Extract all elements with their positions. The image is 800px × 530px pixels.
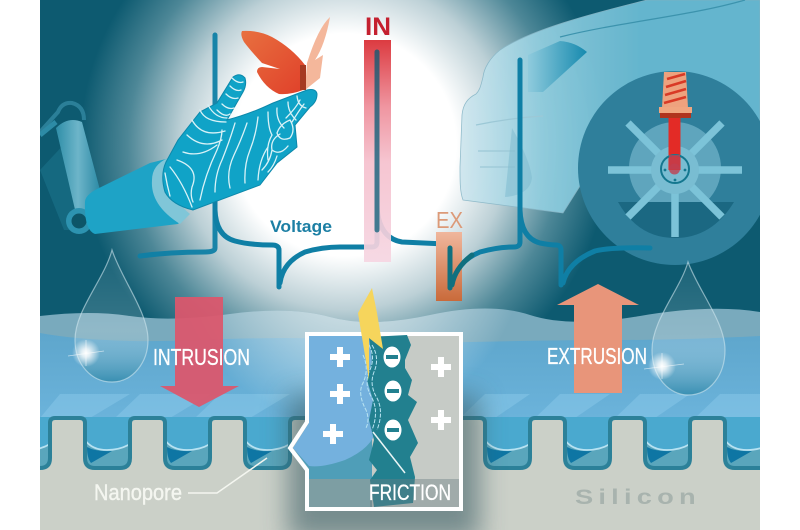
IN marker: [364, 13, 391, 262]
finger contour lines: [165, 78, 306, 207]
voltage label: Voltage: [270, 217, 332, 236]
water layer: [40, 308, 760, 418]
butterfly: [241, 17, 330, 94]
icon: wheel hub: [661, 155, 689, 183]
plus charges: [323, 347, 451, 444]
background glow: [40, 0, 760, 322]
pore water and light ripples: [40, 394, 760, 418]
glow over water: [223, 308, 504, 404]
nanopore label: [94, 458, 267, 505]
silicon label: Silicon: [575, 486, 701, 509]
water drop right: [644, 262, 725, 395]
EX marker: [436, 207, 472, 301]
extrusion label: EXTRUSION: [547, 343, 647, 369]
IN label: IN: [365, 13, 391, 41]
nanopore pointer line: [373, 432, 405, 473]
icon: headlight: [528, 41, 587, 92]
wheel: [578, 71, 772, 265]
voltage line: [140, 35, 650, 288]
nanopores: [0, 417, 775, 530]
lightning bolt: [358, 288, 383, 380]
car: [460, 0, 772, 265]
silicon substrate: [0, 418, 775, 530]
nanopore label: Nanopore: [94, 480, 182, 505]
EX label: EX: [436, 207, 463, 233]
minus charges: [384, 346, 402, 440]
inset shadow: [288, 395, 480, 530]
bottom band base: [309, 479, 372, 507]
extrusion arrow: [557, 284, 639, 393]
icon: suspension spring: [659, 72, 692, 170]
bottom band overlay: [370, 479, 459, 507]
icon: wheel spokes: [608, 123, 742, 237]
intrusion arrow: [160, 297, 239, 407]
robot arm: [40, 103, 100, 234]
icon: car roof line: [560, 0, 745, 37]
hand: [85, 75, 317, 234]
jagged solid layer: [367, 335, 418, 507]
intrusion label: INTRUSION: [153, 344, 250, 370]
blue liquid section: [293, 336, 372, 479]
inset panel: friction: [290, 288, 461, 509]
friction squiggles: [361, 345, 380, 430]
tire shadow arc: [618, 202, 734, 238]
friction label: FRICTION: [369, 480, 451, 505]
water drop left: [68, 250, 148, 382]
sleeve: [85, 158, 187, 234]
